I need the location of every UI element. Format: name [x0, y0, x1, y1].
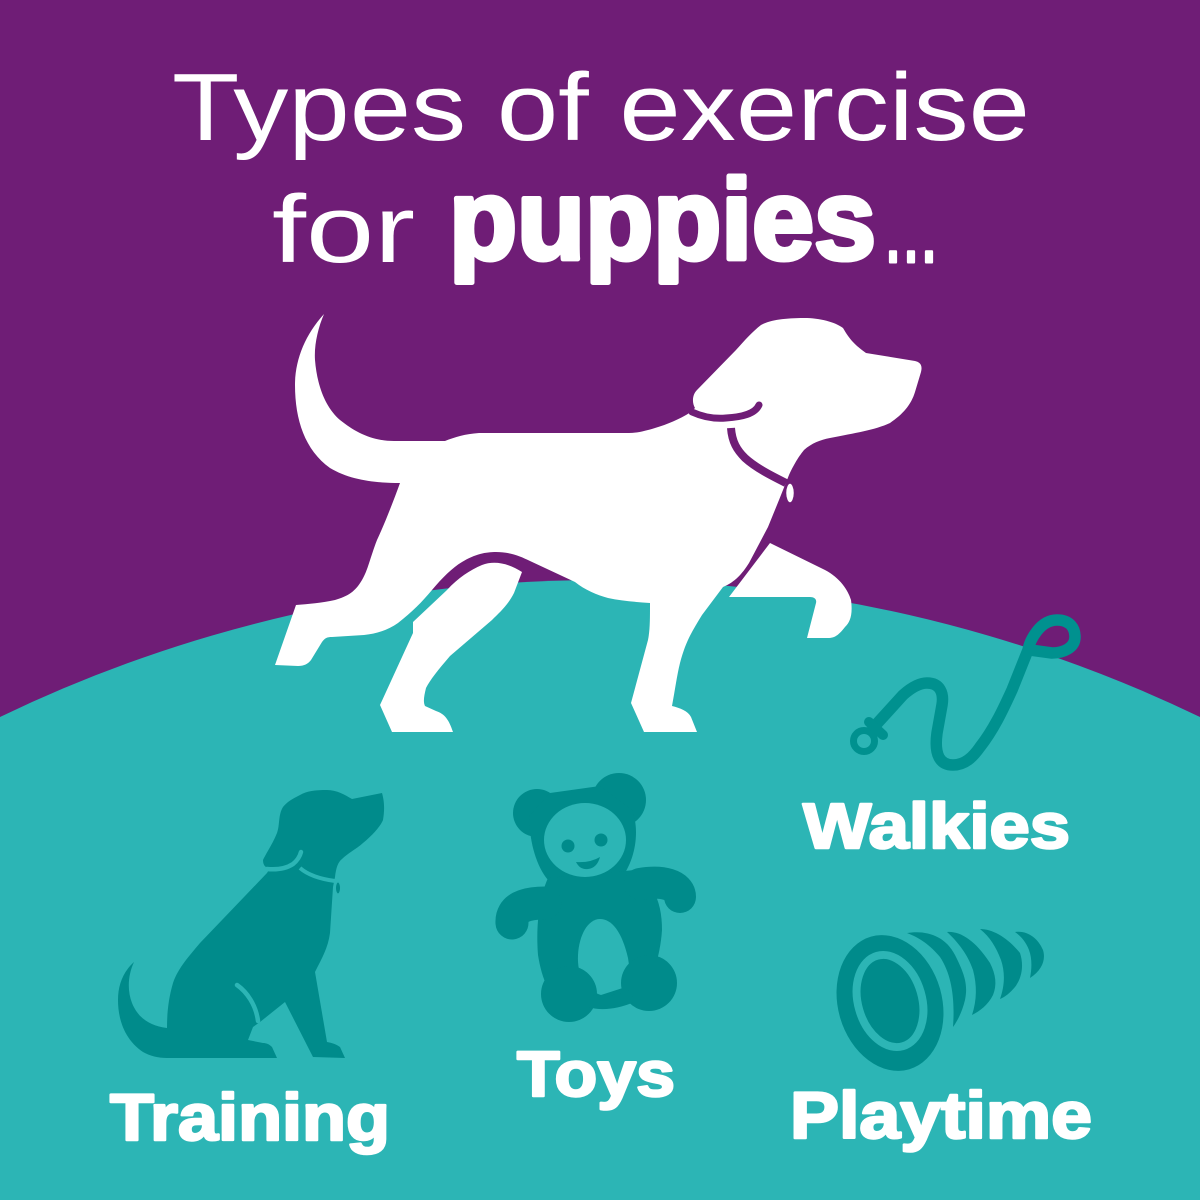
bear belly	[578, 919, 632, 995]
dog ear line	[692, 405, 759, 418]
sitting dog leg line	[237, 985, 258, 1021]
icon: teddy bear	[512, 773, 680, 1022]
bear feet	[541, 966, 597, 1022]
dog collar	[731, 428, 786, 483]
teal hill	[0, 580, 1200, 1200]
dog tag	[786, 483, 794, 503]
title: Types of exercise	[172, 54, 1030, 161]
sitting dog ear line	[267, 852, 301, 869]
label: walkies: Walkies	[803, 790, 1070, 862]
label: toys: Toys	[517, 1038, 675, 1110]
label: training: Training	[110, 1080, 390, 1154]
bear face	[544, 803, 626, 877]
title	[172, 54, 1030, 284]
dog hind leg	[380, 563, 522, 732]
icon: playtime toy	[821, 922, 1044, 1084]
dog body	[275, 314, 922, 732]
label: playtime: Playtime	[790, 1078, 1092, 1152]
dog raised front leg	[729, 543, 852, 638]
sitting dog tag	[336, 882, 340, 894]
icon: white walking dog	[275, 314, 922, 732]
title: for	[272, 176, 415, 283]
title: puppies	[449, 157, 876, 284]
icon: walkies lead	[854, 620, 1075, 765]
sitting dog collar	[300, 868, 335, 881]
title: ...	[884, 176, 938, 283]
icon: sitting dog	[118, 790, 384, 1058]
